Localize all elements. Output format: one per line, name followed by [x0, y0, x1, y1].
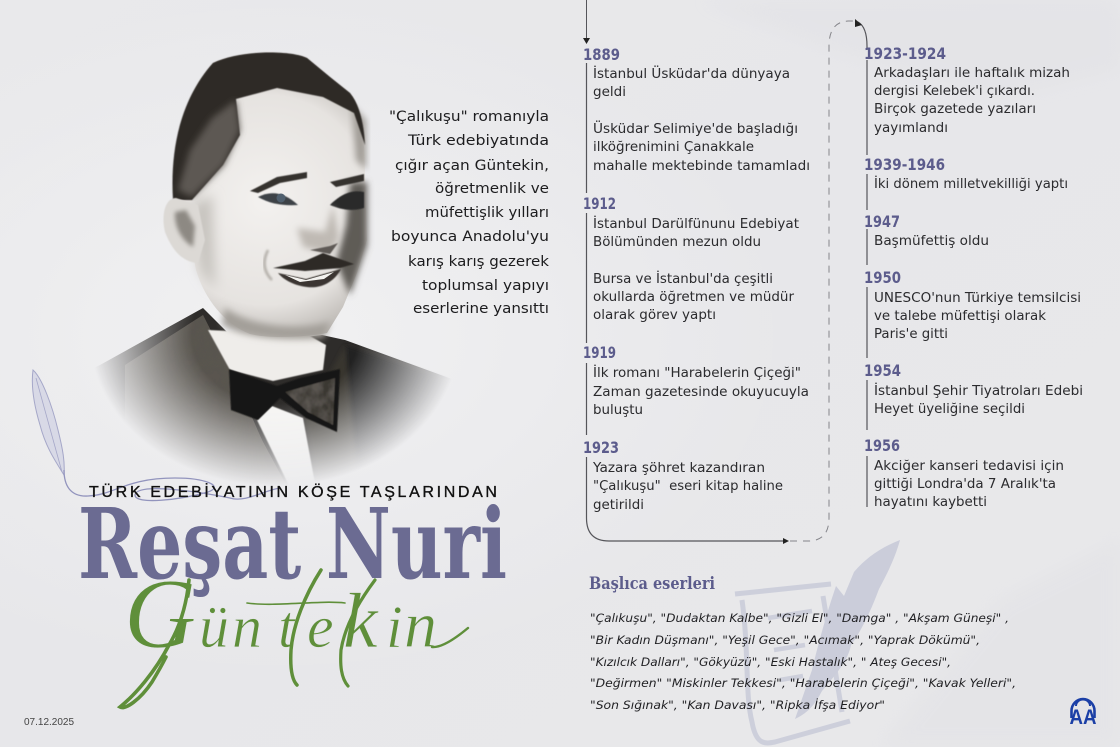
intro paragraph	[389, 109, 550, 317]
1950: ve talebe müfettişi olarak	[874, 309, 1046, 324]
1912: Bölümünden mezun oldu	[593, 235, 761, 250]
1947: 1947	[864, 212, 900, 231]
timeline column 2	[864, 44, 1083, 510]
1939-1946: 1939-1946	[864, 155, 945, 174]
title: Güntekin: G	[124, 558, 196, 669]
list of major works: "Çalıkuşu", "Dudaktan Kalbe", "Gizli El", "Damga" , "Akşam Güneşi" ,	[590, 611, 1009, 625]
1912	[583, 194, 799, 323]
1889: İstanbul Üsküdar'da dünyaya	[593, 65, 790, 82]
timeline column 1	[583, 45, 810, 513]
1939-1946	[864, 155, 1068, 192]
subtitle: TÜRK EDEBİYATININ KÖŞE TAŞLARINDAN	[89, 482, 497, 501]
icon: quill with flourish	[32, 370, 280, 501]
1919: İlk romanı "Harabelerin Çiçeği"	[593, 365, 801, 381]
list of major works: "Değirmen" "Miskinler Tekkesi", "Harabelerin Çiçeği", "Kavak Yelleri",	[590, 676, 1016, 690]
smile	[278, 269, 341, 287]
list of major works: "Bir Kadın Düşmanı", "Yeşil Gece", "Acımak", "Yaprak Dökümü",	[590, 633, 980, 647]
1889	[583, 45, 810, 174]
1939-1946: İki dönem milletvekilliği yaptı	[874, 176, 1068, 192]
1889: geldi	[593, 85, 626, 100]
1912: Bursa ve İstanbul'da çeşitli	[593, 271, 773, 287]
1889: Üsküdar Selimiye'de başladığı	[593, 120, 798, 137]
1923-1924: 1923-1924	[864, 44, 946, 63]
1923-1924: dergisi Kelebek'i çıkardı.	[874, 84, 1035, 99]
timeline connector	[583, 0, 867, 544]
1919: 1919	[583, 343, 616, 362]
1923-1924: Birçok gazetede yazıları	[874, 102, 1036, 117]
1919: buluştu	[593, 403, 643, 418]
face shading	[336, 182, 367, 295]
1919: Zaman gazetesinde okuyucuyla	[593, 385, 809, 400]
heading: major works: Başlıca eserleri	[589, 574, 715, 594]
1954: İstanbul Şehir Tiyatroları Edebi	[874, 383, 1083, 399]
portrait photo	[60, 53, 470, 520]
bow tie	[229, 369, 340, 432]
title: Güntekin: t	[278, 594, 296, 660]
logo: AA: AA	[1070, 706, 1096, 729]
title: Güntekin: e	[307, 594, 334, 660]
title: Güntekin	[120, 558, 468, 708]
list of major works: "Son Sığınak", "Kan Davası", "Ripka İfşa Ediyor"	[590, 697, 885, 712]
1889: ilköğrenimini Çanakkale	[593, 140, 754, 155]
eyes	[258, 193, 298, 205]
intro paragraph: "Çalıkuşu" romanıyla	[389, 109, 549, 125]
1923: Yazara şöhret kazandıran	[592, 461, 765, 476]
white shirt	[256, 406, 314, 483]
1950: UNESCO'nun Türkiye temsilcisi	[874, 291, 1081, 306]
eyebrows	[250, 172, 307, 193]
title: Güntekin: k	[343, 577, 379, 664]
1950	[864, 268, 1081, 342]
1912: okullarda öğretmen ve müdür	[593, 290, 795, 305]
1923-1924: Arkadaşları ile haftalık mizah	[874, 66, 1070, 81]
intro paragraph: boyunca Anadolu'yu	[391, 229, 549, 245]
1923	[583, 438, 783, 513]
title: Güntekin: n	[232, 594, 262, 660]
collar	[208, 330, 326, 381]
intro paragraph: öğretmenlik ve	[435, 181, 549, 197]
list of major works	[590, 611, 1016, 712]
1954: 1954	[864, 361, 901, 380]
1956: 1956	[864, 436, 900, 455]
1923: "Çalıkuşu" eseri kitap haline	[593, 479, 783, 494]
1956	[864, 436, 1064, 510]
intro paragraph: müfettişlik yılları	[425, 205, 549, 221]
1956: gittiği Londra'da 7 Aralık'ta	[874, 477, 1056, 492]
nose shadow	[297, 205, 339, 254]
mustache	[273, 253, 354, 271]
1954: Heyet üyeliğine seçildi	[874, 402, 1025, 417]
decorative script strokes	[120, 570, 468, 708]
1912: olarak görev yaptı	[593, 308, 716, 323]
1956: hayatını kaybetti	[874, 495, 987, 510]
title: Güntekin: i	[386, 594, 403, 660]
jacket and shoulders	[98, 308, 448, 483]
ear	[163, 198, 205, 263]
neck and face	[174, 53, 367, 337]
title: Güntekin: n	[404, 589, 437, 662]
1950: 1950	[864, 268, 901, 287]
1923: 1923	[583, 438, 619, 457]
1923: getirildi	[593, 498, 644, 513]
intro paragraph: karış karış gezerek	[408, 254, 550, 270]
1947	[864, 212, 989, 249]
date: 07.12.2025	[24, 717, 74, 728]
1889: 1889	[583, 45, 620, 64]
1923-1924: yayımlandı	[874, 121, 948, 136]
1912: İstanbul Darülfünunu Edebiyat	[593, 216, 799, 232]
1923-1924	[864, 44, 1070, 136]
intro paragraph: toplumsal yapıyı	[422, 278, 549, 294]
1912: 1912	[583, 194, 616, 213]
hair	[172, 53, 365, 200]
list of major works: "Kızılcık Dalları", "Gökyüzü", "Eski Hastalık", " Ateş Gecesi",	[590, 655, 951, 669]
1954	[864, 361, 1083, 417]
intro paragraph: eserlerine yansıttı	[413, 301, 549, 317]
arrowheads	[583, 19, 862, 544]
title: Güntekin: ü	[199, 594, 229, 660]
background icon: scroll and quill	[735, 540, 900, 743]
intro paragraph: çığır açan Güntekin,	[395, 158, 549, 174]
1947: Başmüfettiş oldu	[874, 234, 989, 249]
intro paragraph: Türk edebiyatında	[407, 133, 549, 149]
title: Reşat Nuri: Reşat Nuri	[78, 487, 507, 601]
1919	[583, 343, 809, 418]
1950: Paris'e gitti	[874, 327, 948, 342]
1956: Akciğer kanseri tedavisi için	[874, 459, 1064, 474]
1889: mahalle mektebinde tamamladı	[593, 159, 810, 174]
